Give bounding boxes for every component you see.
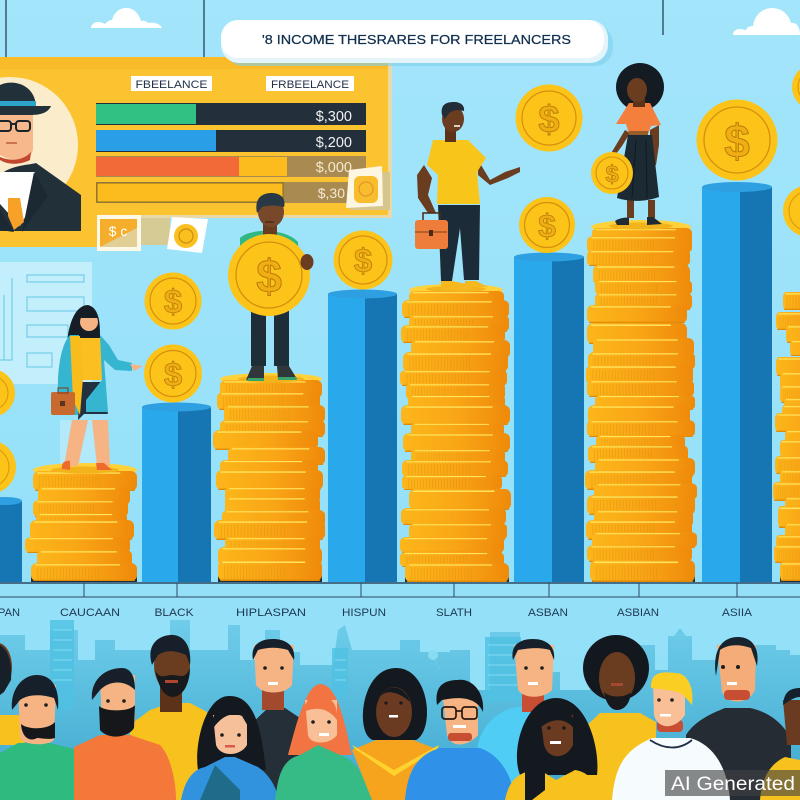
coin stack 5 [773, 292, 800, 582]
figure: woman with afro: $ [605, 161, 619, 188]
bar row 3 [96, 156, 366, 177]
bar 1 [142, 402, 211, 582]
coin stack 3 [400, 284, 511, 582]
coin: right edge lower [783, 185, 800, 237]
city skyline [0, 620, 800, 800]
person 8: woman in orange [352, 668, 439, 800]
person 7: red-haired woman in green [275, 684, 372, 800]
top frame lines [6, 0, 663, 57]
ghost chart sheet [0, 262, 108, 470]
panel column labels [131, 76, 354, 91]
coin: high middle: $ [538, 99, 560, 141]
person 13: blond man in white [612, 672, 730, 800]
bar row 4: $,30 [318, 185, 345, 201]
person 9: man with glasses in blue [405, 680, 515, 800]
icon: note card right [346, 166, 390, 210]
category labels: ASBIAN [617, 607, 659, 619]
badge: AI Generated: AI Generated [671, 774, 795, 795]
person 15: right edge man [760, 688, 800, 800]
icon: right cloud [733, 8, 800, 35]
panel portrait [0, 77, 81, 232]
coin stack 4 [585, 220, 697, 582]
icon: left cloud [91, 8, 162, 28]
chart baseline [0, 583, 800, 597]
figure: woman with afro [591, 63, 664, 225]
person 6: man with dark shirt [250, 639, 300, 800]
category labels: CAUCAAN [60, 607, 120, 619]
title: '8 INCOME THESRARES FOR FREELANCERS [262, 32, 571, 47]
bar 0 [0, 497, 22, 582]
category labels: BLACK [154, 607, 194, 619]
coin: on bar 4: $ [724, 115, 750, 167]
bar 3 [514, 252, 584, 582]
panel column labels: FRBEELANCE [271, 79, 349, 91]
panel column labels: FBEELANCE [136, 79, 208, 91]
category labels: HIPLASPAN [236, 607, 306, 619]
coin: on bar 2 [334, 230, 392, 290]
bar 2 [328, 290, 397, 582]
person 12: man with afro [582, 635, 656, 800]
coin: floating on bar 1: $ [164, 356, 182, 393]
person 14: man with black shirt [686, 637, 791, 800]
bar row 1: $,300 [316, 109, 352, 125]
person 2: bearded man in green [0, 675, 92, 800]
coin: left edge lower [0, 440, 16, 494]
badge: AI Generated [665, 770, 800, 796]
figure: man holding coin [228, 193, 314, 381]
figure: man holding coin: $ [256, 250, 282, 302]
coin: floating on bar 1 [144, 344, 202, 402]
panel: income comparison board [0, 57, 392, 253]
category labels: ASIIA [722, 607, 753, 619]
coin: floating upper: $ [164, 283, 182, 320]
bar row 2 [96, 130, 366, 152]
person 10: man with light blue shirt [477, 639, 554, 800]
coin: right edge upper [792, 64, 800, 110]
coin: floating upper [144, 272, 202, 330]
coin: on bar 2: $ [354, 242, 372, 279]
coin: left edge upper [0, 369, 15, 417]
person 5: woman in blue [181, 696, 278, 800]
bar row 3: $,000 [316, 160, 352, 176]
bar row 4 [96, 182, 350, 203]
bar row 2: $,200 [316, 135, 352, 151]
icon: dollar note card [97, 215, 141, 251]
category labels: HISPUN [342, 607, 386, 619]
person 4: man with yellow shirt [130, 635, 207, 800]
coin: on bar 3 [519, 197, 575, 253]
category labels: ASBAN [528, 607, 568, 619]
person 11: woman in yellow [505, 698, 600, 800]
coin: on bar 3: $ [538, 208, 556, 244]
category labels: SLATH [436, 607, 472, 619]
coin stack 1 [25, 463, 137, 582]
person 1: left edge [0, 643, 25, 745]
person 3: bearded man in orange [74, 668, 176, 800]
coin: on bar 4 [696, 100, 778, 180]
icon: dollar note card: $ c [109, 223, 127, 239]
coin: high middle [516, 84, 582, 152]
bar 4 [702, 182, 772, 582]
title pill [221, 20, 613, 66]
bar row 1 [96, 103, 366, 125]
category labels [0, 607, 753, 619]
figure: woman with cardigan [51, 305, 143, 470]
icon: coin note card [167, 217, 208, 253]
figure: man with briefcase [415, 102, 520, 290]
coin stack 2 [213, 373, 325, 582]
